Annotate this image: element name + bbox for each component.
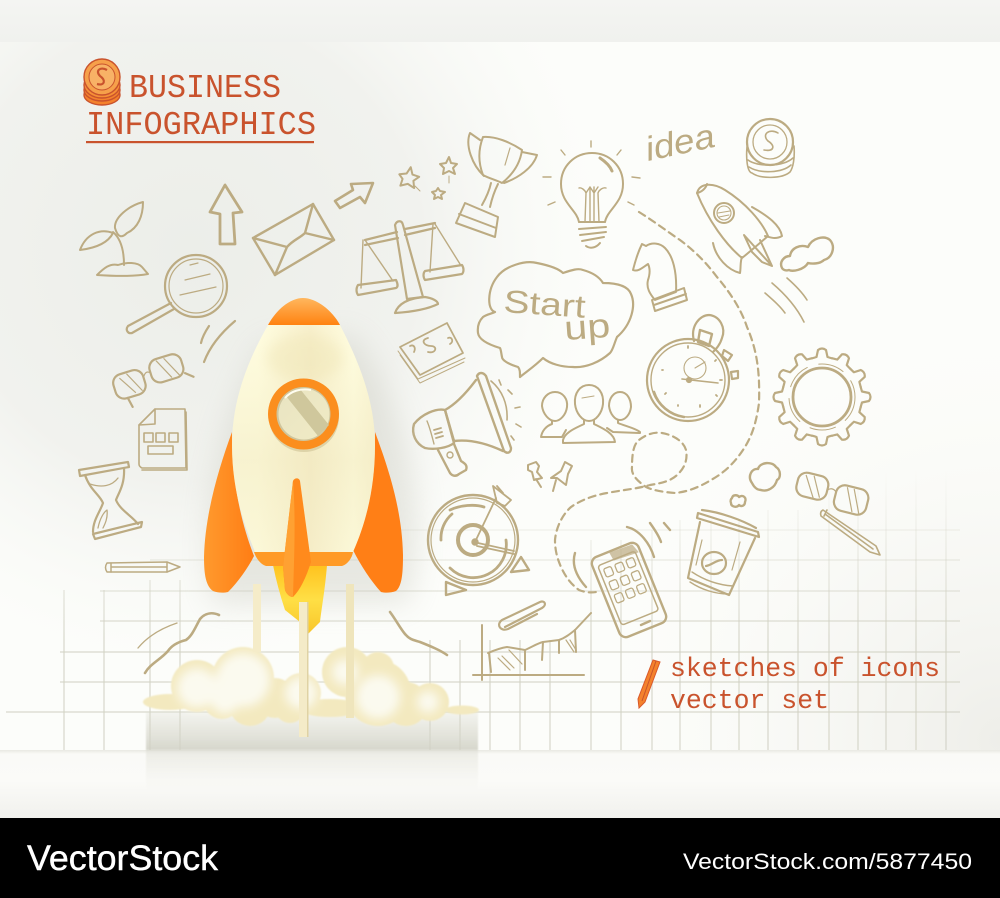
porthole — [268, 378, 339, 452]
icon: megaphone — [413, 373, 521, 476]
icon: push pins — [528, 462, 572, 491]
icon: arrow right — [335, 183, 373, 208]
icon: file document — [139, 409, 187, 470]
dashed flight path — [555, 212, 759, 592]
text: start up — [503, 283, 611, 348]
exhaust clouds — [143, 647, 479, 726]
icon: motion lines — [201, 321, 235, 362]
floor — [0, 750, 1000, 818]
icon: trophy side money — [398, 323, 465, 383]
icon: paper clip — [499, 602, 545, 630]
rocket nose — [268, 298, 340, 325]
heading text: BUSINESS — [129, 70, 281, 107]
icon: growth chart — [473, 613, 591, 680]
left fin — [204, 432, 254, 593]
launch sticks — [253, 584, 354, 737]
icon: smartphone — [574, 523, 670, 639]
centre fin — [283, 478, 311, 597]
heading: business infographics — [84, 59, 316, 144]
icon: chess knight — [633, 244, 687, 311]
footer bar: VectorStock.com/5877450 — [683, 849, 972, 874]
icon: small puffs — [731, 463, 780, 507]
rocket soft shadow — [208, 334, 418, 604]
icon: scales — [356, 221, 464, 313]
icon: glasses right — [793, 471, 871, 517]
text: start up: Start — [503, 283, 587, 325]
sketched icons — [79, 117, 880, 680]
icon: gear — [774, 348, 870, 446]
rocket shadow on wall and floor — [146, 712, 478, 792]
rocket flame — [273, 565, 327, 634]
footer bar: VectorStock — [27, 839, 219, 878]
caption: sketches of icons vector set: vector set — [670, 686, 829, 716]
icon: speech bubble start up — [478, 262, 633, 377]
icon: small rocket — [697, 184, 782, 273]
icon: hourglass — [79, 462, 142, 539]
icon: arrow up — [210, 185, 242, 244]
icon: trophy — [456, 133, 537, 237]
grid paper — [6, 470, 960, 750]
icon: sprout — [80, 202, 148, 276]
cloud highlights — [177, 653, 439, 719]
icon: envelope — [253, 204, 334, 275]
icon: coffee cup — [688, 510, 759, 595]
rocket illustration — [204, 298, 418, 634]
icon: stopwatch — [647, 315, 738, 421]
icon: pencil right — [821, 510, 880, 555]
icon: pencil small — [106, 562, 180, 572]
icon: motion lines right — [765, 278, 807, 322]
icon: small cloud — [781, 238, 833, 271]
top band — [0, 0, 1000, 42]
icon: orange pencil — [638, 660, 660, 708]
right fin — [353, 432, 403, 593]
text: idea: idea — [642, 117, 718, 169]
icon: tan coin stack — [747, 119, 794, 177]
caption: sketches of icons vector set: sketches of icons — [670, 654, 940, 684]
heading: business infographics: INFOGRAPHICS — [86, 107, 316, 144]
rocket body — [232, 325, 375, 552]
text: start up: up — [563, 307, 611, 348]
swoosh lines near rocket — [138, 612, 447, 673]
icon: light bulb — [543, 141, 640, 248]
icon: target with arrows — [428, 486, 529, 595]
footer bar — [0, 818, 1000, 898]
icon: magnifying glass — [127, 255, 227, 333]
rocket collar — [254, 552, 353, 566]
icon: orange coin stack — [84, 59, 120, 105]
caption: sketches of icons vector set — [638, 654, 940, 716]
icon: team of people — [541, 385, 640, 443]
icon: stars — [397, 157, 457, 199]
cloud silhouette — [143, 647, 479, 726]
icon: glasses left — [110, 350, 197, 410]
